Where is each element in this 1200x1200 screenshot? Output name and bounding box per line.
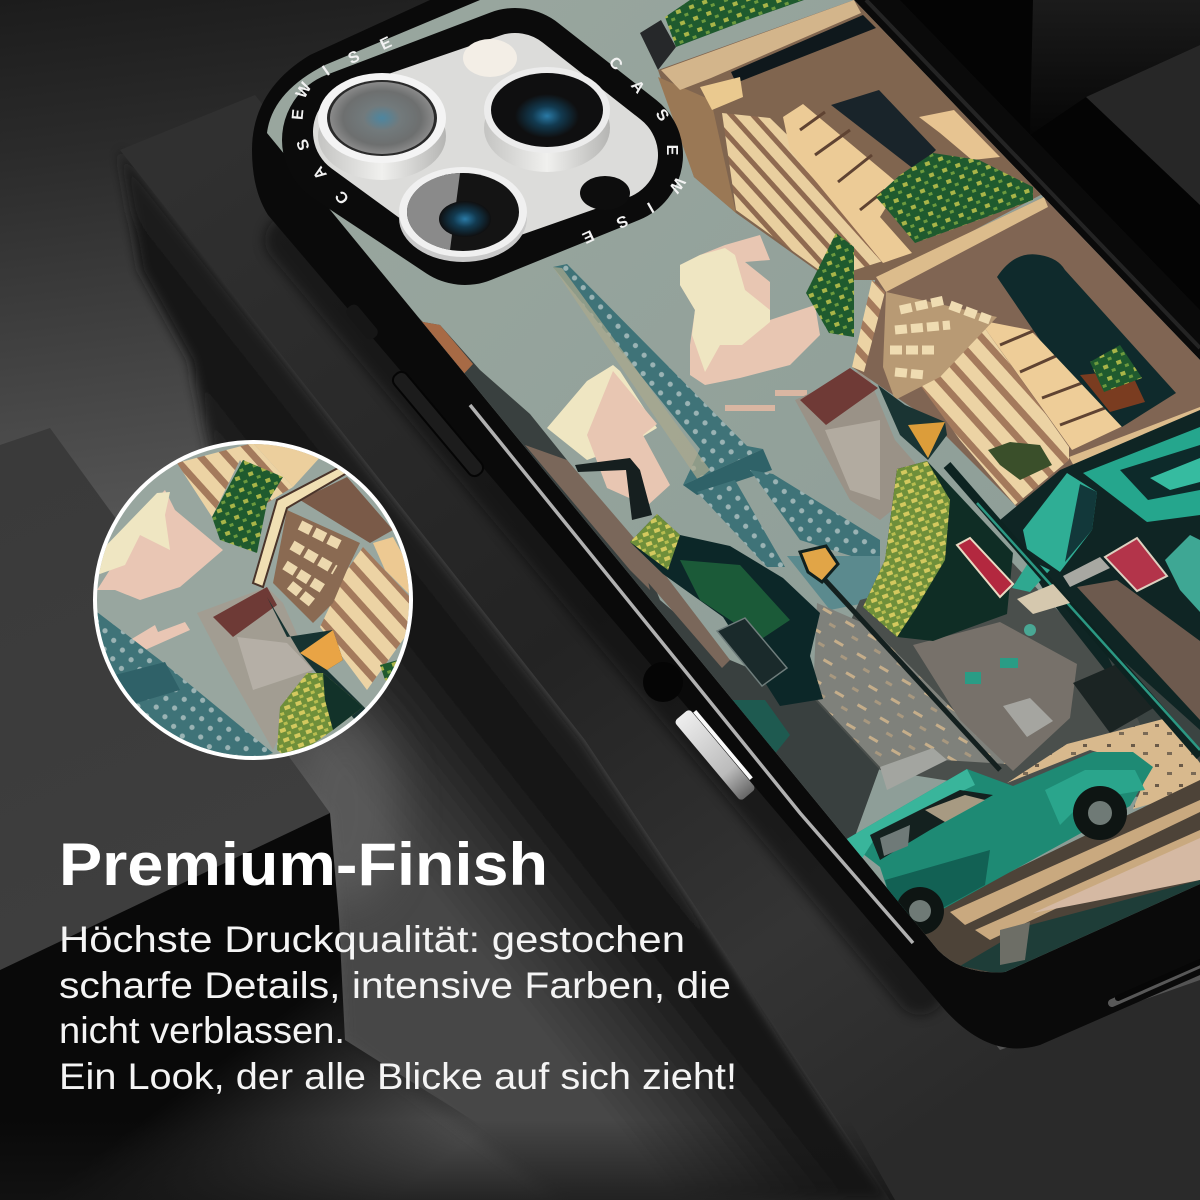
lower building with arch window — [852, 197, 1200, 510]
circle sky — [97, 444, 409, 756]
phone case body — [252, 0, 1200, 1048]
CASEWISE engraving: right: S — [613, 211, 630, 231]
cloud: lower — [547, 365, 670, 506]
dark street signpost — [717, 618, 787, 686]
side buttons — [344, 302, 756, 801]
round green tree — [863, 461, 1013, 641]
side plant — [806, 233, 854, 337]
street signs — [957, 538, 1167, 684]
glossy edge highlight — [470, 405, 913, 943]
teal storefront — [1012, 427, 1200, 612]
lamp post mid — [800, 546, 1000, 770]
flash — [463, 39, 517, 77]
sandy pavement — [1007, 718, 1200, 809]
CASEWISE engraving: left: E — [378, 34, 395, 54]
body text — [59, 919, 737, 1097]
CASEWISE engraving: left — [290, 34, 395, 207]
upper building — [658, 0, 1050, 280]
CASEWISE engraving: right: C — [605, 54, 626, 74]
body text: scharfe Details, intensive Farben, die — [59, 965, 731, 1006]
circle ornament — [273, 510, 360, 623]
body text: nicht verblassen. — [59, 1010, 345, 1051]
CASEWISE engraving: left: E — [290, 108, 307, 121]
CASEWISE engraving: left: W — [293, 79, 316, 102]
cloud: upper — [680, 235, 820, 411]
CASEWISE engraving: right: E — [579, 226, 596, 246]
circle tower — [97, 612, 273, 765]
main lamp post — [878, 385, 1200, 756]
lens: ultra wide — [318, 73, 446, 180]
distant building — [795, 368, 916, 520]
balcony plant — [876, 153, 1033, 243]
CASEWISE engraving: left: S — [346, 48, 363, 68]
charging port — [1112, 964, 1200, 1003]
art border sheen — [866, 0, 1200, 348]
CASEWISE engraving: right — [579, 54, 688, 246]
small planter — [988, 442, 1052, 480]
dark tree left — [630, 514, 823, 706]
lidar — [580, 176, 630, 210]
lens: telephoto — [399, 167, 527, 262]
teal vintage car — [845, 752, 1153, 935]
phone artwork: pixel art Paris street — [260, 0, 1200, 1000]
parked cars — [880, 664, 1157, 790]
circle striped wall — [177, 443, 293, 517]
lens: main — [484, 67, 610, 172]
street base — [816, 562, 1144, 797]
CASEWISE engraving: left: I — [320, 63, 333, 80]
CASEWISE engraving: right: S — [652, 106, 672, 125]
CASEWISE engraving: left: S — [294, 136, 314, 152]
body text: Ein Look, der alle Blicke auf sich zieht! — [59, 1056, 737, 1097]
body text: Höchste Druckqualität: gestochen — [59, 919, 685, 960]
Eiffel tower — [553, 264, 880, 610]
circle cornice — [253, 467, 347, 587]
lower street stripes — [900, 780, 1200, 980]
magnifier circle — [90, 440, 420, 770]
circle house — [197, 587, 313, 750]
CASEWISE engraving: right: A — [627, 77, 648, 97]
sky — [260, 0, 1200, 1000]
CASEWISE engraving: right: I — [644, 198, 656, 215]
circle clouds — [97, 490, 223, 650]
road left — [813, 603, 1077, 771]
CASEWISE engraving: right: E — [663, 145, 680, 156]
heading: Premium-Finish — [59, 831, 548, 898]
top planter — [640, 0, 804, 70]
circle plant — [212, 460, 283, 553]
camera island — [290, 34, 688, 262]
CASEWISE engraving: left: C — [332, 187, 353, 207]
circle tree — [277, 673, 363, 760]
left street buildings — [419, 318, 880, 839]
dark street right — [1000, 410, 1200, 770]
CASEWISE engraving: right: W — [665, 174, 688, 196]
CASEWISE engraving: left: A — [310, 163, 331, 182]
circle lamp — [267, 597, 367, 720]
